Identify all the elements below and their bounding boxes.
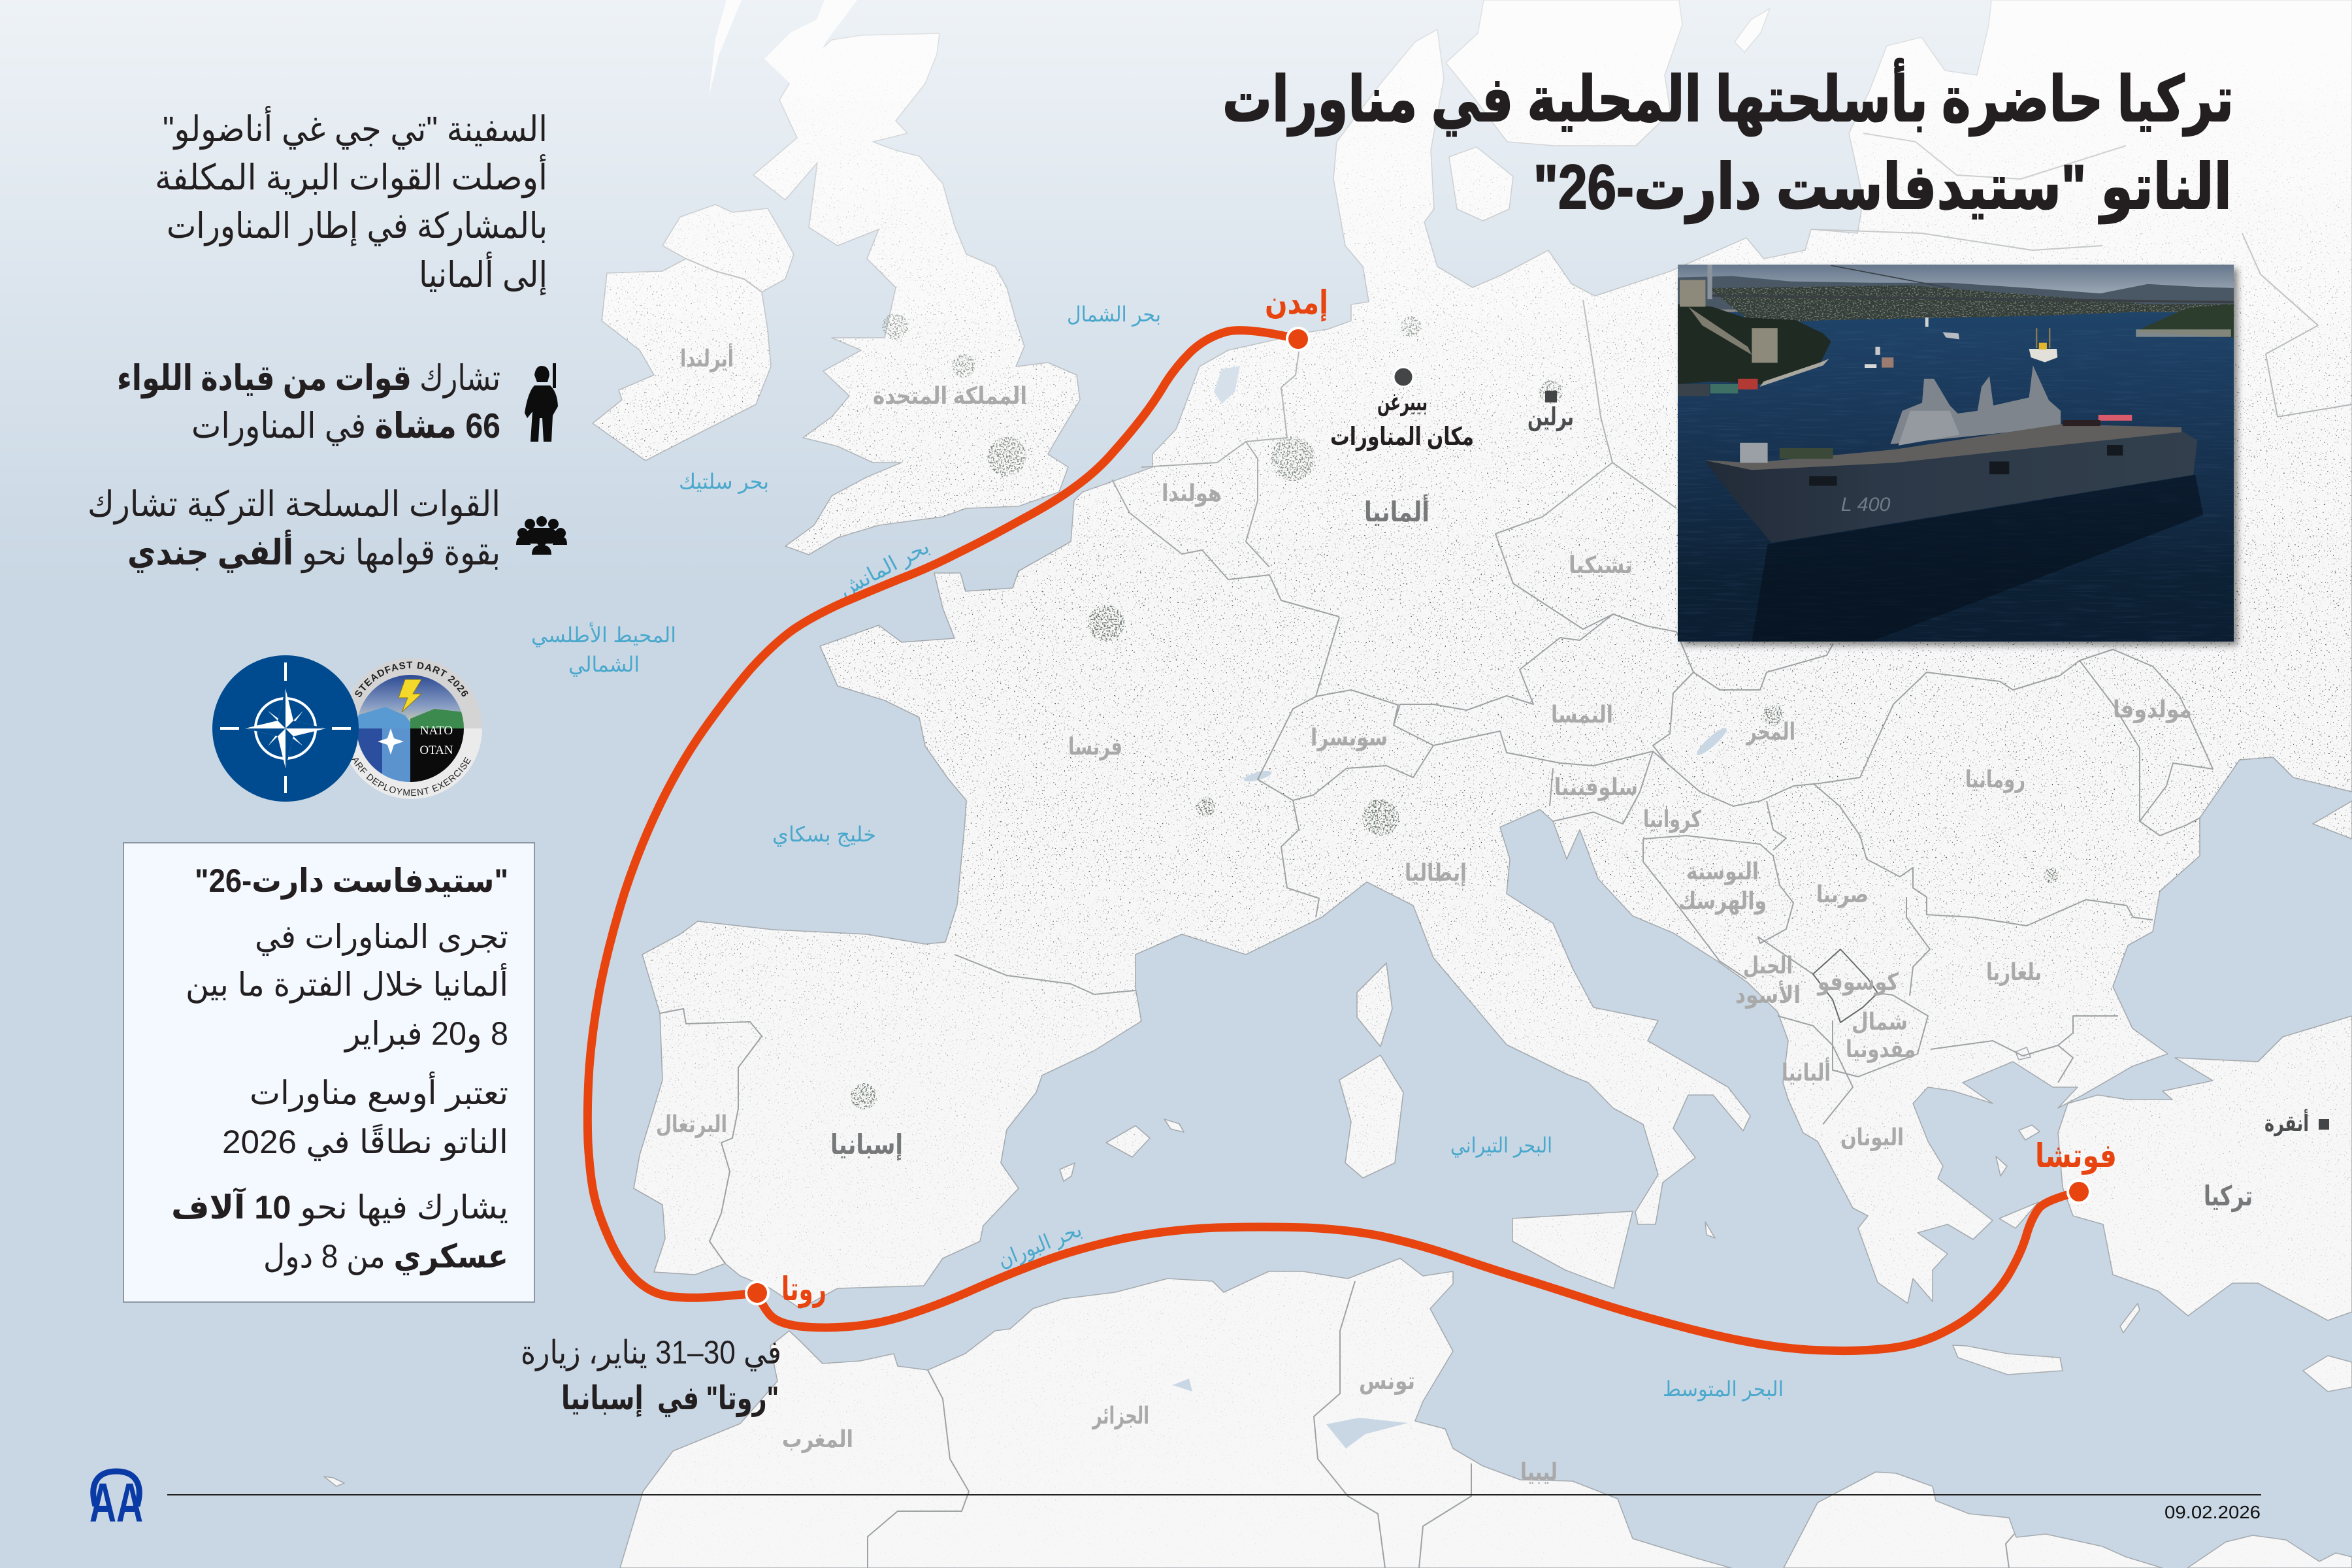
map: city clusters (851, 314, 2059, 1109)
map: country borders (660, 133, 2352, 1568)
label: English Channel: بحر المانش (835, 534, 934, 602)
port: Emden (1265, 284, 1328, 350)
label: North Atlantic line 2: الشمالي (568, 653, 640, 677)
logo: Steadfast Dart 2026 badge (350, 658, 482, 799)
label: Croatia: كرواتيا (1643, 806, 1701, 833)
label: Portugal: البرتغال (656, 1111, 727, 1138)
logo: NATO (212, 655, 359, 802)
label: Turkey: تركيا (2204, 1181, 2253, 1213)
panel text: dates: 8 و20 فبراير (343, 1015, 508, 1053)
logo: Anadolu Agency (90, 1471, 143, 1533)
text block: troop numbers (88, 485, 500, 573)
footer rule (167, 1494, 2261, 1495)
label: Bulgaria: بلغاريا (1986, 958, 2042, 986)
label: North Atlantic line 1: المحيط الأطلسي (531, 622, 676, 647)
label: Bosnia line 2: والهرسك (1678, 887, 1767, 915)
port: Rota: روتا (781, 1271, 826, 1309)
label: Hungary: المجر (1745, 718, 1795, 745)
text block: Rota visit: "روتا" في إسبانيا (561, 1380, 779, 1418)
exercise site: Bergen: مكان المناورات (1330, 423, 1474, 451)
label: Austria: النمسا (1551, 701, 1613, 728)
map: lakes (1173, 366, 1729, 1448)
icon: group of people (516, 516, 567, 555)
label: Spain: إسبانيا (830, 1129, 903, 1161)
text block: Rota visit: في 30–31 يناير، زيارة (521, 1334, 781, 1371)
sea labels (531, 302, 1784, 1401)
label: Libya: ليبيا (1520, 1458, 1558, 1485)
label: Moldova: مولدوفا (2113, 696, 2192, 723)
label: Germany: ألمانيا (1364, 494, 1429, 527)
label: Albania: ألبانيا (1782, 1057, 1831, 1086)
panel text: scope: الناتو نطاقًا في 2026 (222, 1123, 508, 1161)
logo: Steadfast Dart 2026 badge: OTAN (419, 743, 453, 757)
capital: Ankara: أنقرة (2264, 1109, 2309, 1137)
port: Foca: فوتشا (2035, 1137, 2117, 1175)
label: Morocco: المغرب (782, 1426, 853, 1453)
label: Bay of Biscay: خليج بسكاي (772, 823, 876, 847)
text block: ship intro: بالمشاركة في إطار المناورات (167, 206, 547, 246)
panel text: scope (222, 1071, 508, 1161)
text block: ship intro: إلى ألمانيا (419, 252, 547, 295)
label: Czechia: تشيكيا (1569, 551, 1633, 578)
panel text: dates: تجرى المناورات في (255, 919, 508, 956)
label: North Macedonia line 1: شمال (1852, 1008, 1908, 1035)
label: Alboran Sea: بحر البوران (994, 1217, 1085, 1273)
label: Romania: رومانيا (1965, 766, 2025, 793)
panel: Steadfast Dart 26 facts (123, 843, 534, 1302)
logo: Steadfast Dart 2026 badge: ARF DEPLOYMENT EXERCISE (350, 755, 473, 798)
label: North Macedonia line 2: مقدونيا (1846, 1036, 1916, 1063)
label: Tyrrhenian Sea: البحر التيراني (1450, 1134, 1552, 1158)
text block: ship intro: السفينة "تي جي غي أناضولو" (163, 106, 547, 150)
title: الناتو "ستيدفاست دارت-26" (1533, 152, 2232, 224)
label: UK: المملكة المتحدة (873, 382, 1027, 409)
panel heading: "ستيدفاست دارت-26" (195, 862, 508, 900)
logo: Steadfast Dart 2026 badge: STEADFAST DART 2026 (355, 661, 468, 697)
label: Montenegro line 2: الأسود (1735, 980, 1801, 1009)
label: Netherlands: هولندا (1162, 480, 1222, 507)
exercise site: Bergen: بييرغن (1377, 389, 1428, 416)
label: Serbia: صربيا (1816, 881, 1869, 908)
panel text: participants: يشارك فيها نحو 10 آلاف (171, 1187, 508, 1227)
panel text: participants: عسكري من 8 دول (263, 1238, 508, 1276)
port: Rota (746, 1271, 826, 1309)
label: France: فرنسا (1068, 733, 1122, 760)
label: Algeria: الجزائر (1092, 1402, 1149, 1429)
label: Switzerland: سويسرا (1311, 724, 1388, 751)
top fade over map (0, 0, 2352, 588)
text block: troop numbers: القوات المسلحة التركية تشارك (88, 485, 500, 525)
label: Montenegro line 1: الجبل (1743, 952, 1793, 979)
label: North Sea: بحر الشمال (1067, 302, 1161, 327)
panel text: dates: ألمانيا خلال الفترة ما بين (186, 963, 508, 1004)
icon: soldier (525, 363, 558, 442)
port: Emden: إمدن (1265, 284, 1328, 322)
exercise site: Bergen (1330, 367, 1474, 451)
photo: TCG Anadolu in the Bosphorus: L 400 (1841, 493, 1891, 515)
text block: ship intro (155, 106, 547, 295)
title (1222, 59, 2234, 224)
capital: Berlin (1527, 391, 1574, 431)
text block: infantry brigade (117, 359, 500, 446)
label: Slovenia: سلوفينيا (1554, 774, 1638, 801)
label: Italy: إيطاليا (1405, 859, 1467, 887)
panel text: scope: تعتبر أوسع مناورات (250, 1071, 508, 1113)
country labels (656, 343, 2253, 1485)
panel text: participants (171, 1187, 508, 1276)
text block: infantry brigade: تشارك قوات من قيادة اللواء (117, 359, 500, 399)
date: 09.02.2026 (2164, 1502, 2261, 1522)
panel text: dates (186, 919, 508, 1053)
label: Greece: اليونان (1840, 1124, 1904, 1151)
logo: Anadolu Agency: AA (90, 1472, 143, 1533)
logo: Steadfast Dart 2026 badge: NATO (420, 724, 453, 738)
text block: Rota visit (521, 1334, 781, 1418)
label: Ireland: أيرلندا (680, 343, 734, 372)
route: sailing line (587, 331, 2079, 1351)
text block: ship intro: أوصلت القوات البرية المكلفة (155, 154, 547, 198)
text block: troop numbers: بقوة قوامها نحو ألفي جندي (127, 529, 500, 573)
text block: infantry brigade: 66 مشاة في المناورات (191, 406, 500, 446)
label: Bosnia line 1: البوسنة (1686, 858, 1759, 885)
photo: TCG Anadolu in the Bosphorus (1678, 265, 2238, 645)
label: Kosovo: كوسوفو (1816, 968, 1899, 996)
port: Foca (2035, 1137, 2117, 1203)
label: Mediterranean Sea: البحر المتوسط (1663, 1377, 1784, 1401)
label: Celtic Sea: بحر سلتيك (679, 470, 769, 494)
label: Tunisia: تونس (1359, 1367, 1415, 1395)
capital: Berlin: برلين (1527, 404, 1574, 431)
